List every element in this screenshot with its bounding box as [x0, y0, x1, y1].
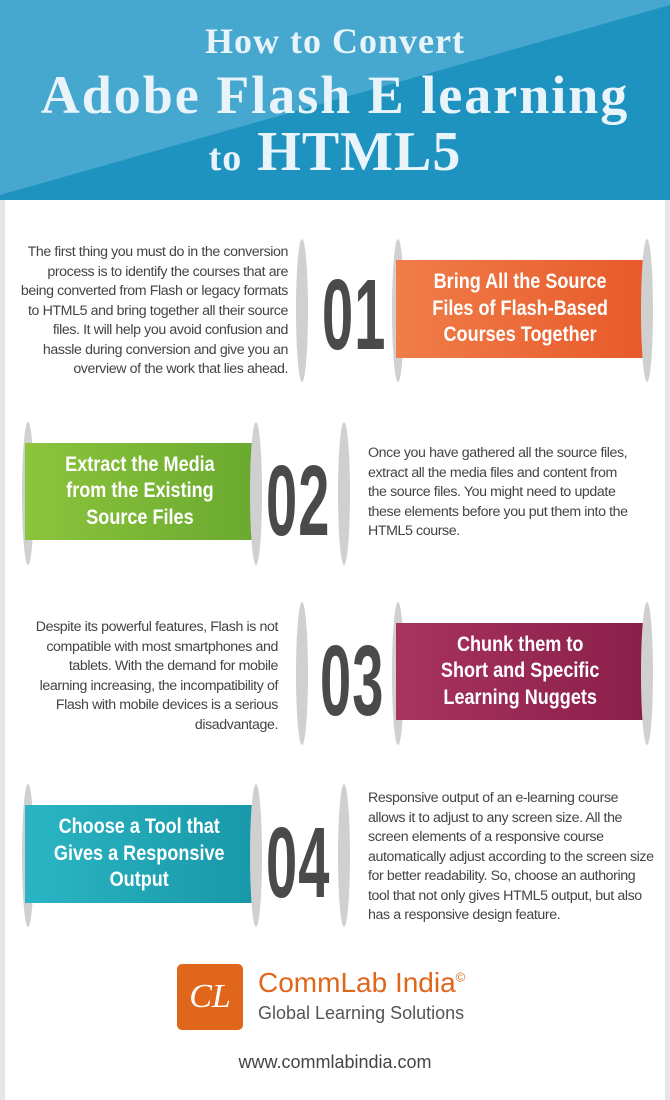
title line 2: Adobe Flash E learning [41, 65, 629, 125]
step 2 text: the source files. You might need to update [368, 484, 615, 500]
step 3 text: Flash with mobile devices is a serious [56, 697, 278, 713]
step 4 text: for better readability. So, choose an authoring [368, 868, 635, 884]
step 4 box: Choose a Tool that [59, 815, 220, 838]
step 4 text: tool that not only gives HTML5 output, but also [368, 888, 642, 904]
logo [177, 964, 465, 1030]
step 4 box: Gives a Responsive [54, 842, 225, 865]
step 1 box: Files of Flash-Based [432, 297, 608, 320]
step 3 text: tablets. With the demand for mobile [69, 658, 278, 674]
step 3 text: disadvantage. [195, 716, 278, 732]
step 4 text: Responsive output of an e-learning course [368, 790, 618, 806]
step 2 [22, 422, 628, 565]
step 4 text: screen elements of a responsive course [368, 829, 604, 845]
header banner [0, 0, 670, 200]
step 2 box: Source Files [86, 506, 193, 529]
step 1 text [21, 244, 288, 377]
step 4 text: allows it to adjust to any screen size. All the [368, 810, 622, 826]
step 1 text: process is to identify the courses that are [47, 264, 288, 280]
step 2 text: extract all the media files and content from [368, 464, 617, 480]
number 01: 01 [322, 259, 387, 371]
step 1 box [396, 260, 644, 358]
brand name: CommLab India© [258, 967, 465, 998]
step 3 box: Chunk them to [457, 633, 583, 656]
step 1 text: files. It will help you avoid confusion and [53, 322, 288, 338]
step 1 text: overview of the work that lies ahead. [73, 361, 288, 377]
step 2 text: these elements before you put them into the [368, 504, 628, 520]
tagline: Global Learning Solutions [258, 1003, 464, 1023]
step 4 text: has a responsive design feature. [368, 907, 560, 923]
step 3 box: Learning Nuggets [443, 686, 597, 709]
step 3 box [396, 623, 644, 720]
step 3 box: Short and Specific [441, 659, 599, 682]
title line 1: How to Convert [205, 21, 465, 61]
step 3 text: learning increasing, the incompatibility of [40, 678, 278, 694]
step 4 [22, 784, 654, 927]
step 1 box: Bring All the Source [434, 270, 606, 293]
step 2 box: Extract the Media [65, 453, 214, 476]
number 03: 03 [320, 625, 385, 737]
step 2 text: Once you have gathered all the source files, [368, 445, 627, 461]
step 2 box [25, 443, 254, 540]
title line 3: to HTML5 [209, 121, 461, 183]
step 1 text: being converted from Flash or legacy formats [21, 283, 288, 299]
step 4 text: automatically adjust according to the screen size [368, 848, 654, 864]
step 3 [36, 602, 653, 745]
step 3 text [36, 619, 278, 732]
step 4 box [25, 805, 254, 903]
icon: CL logo [177, 964, 243, 1030]
step 2 text [368, 445, 628, 539]
step 1 [21, 239, 653, 382]
number 04: 04 [266, 807, 331, 919]
number 02: 02 [266, 445, 331, 557]
step 1 text: to HTML5 and bring together all their source [28, 302, 288, 318]
step 4 text [368, 790, 654, 923]
step 1 box: Courses Together [443, 323, 597, 346]
step 3 text: compatible with most smartphones and [46, 638, 278, 654]
step 3 text: Despite its powerful features, Flash is not [36, 619, 278, 635]
step 1 text: The first thing you must do in the conversion [28, 244, 288, 260]
icon: CL logo: CL [189, 978, 231, 1015]
step 2 text: HTML5 course. [368, 523, 460, 539]
step 4 box: Output [110, 868, 169, 891]
step 2 box: from the Existing [66, 479, 213, 502]
step 1 text: hassle during conversion and give you an [43, 342, 288, 358]
url: www.commlabindia.com [238, 1052, 432, 1072]
